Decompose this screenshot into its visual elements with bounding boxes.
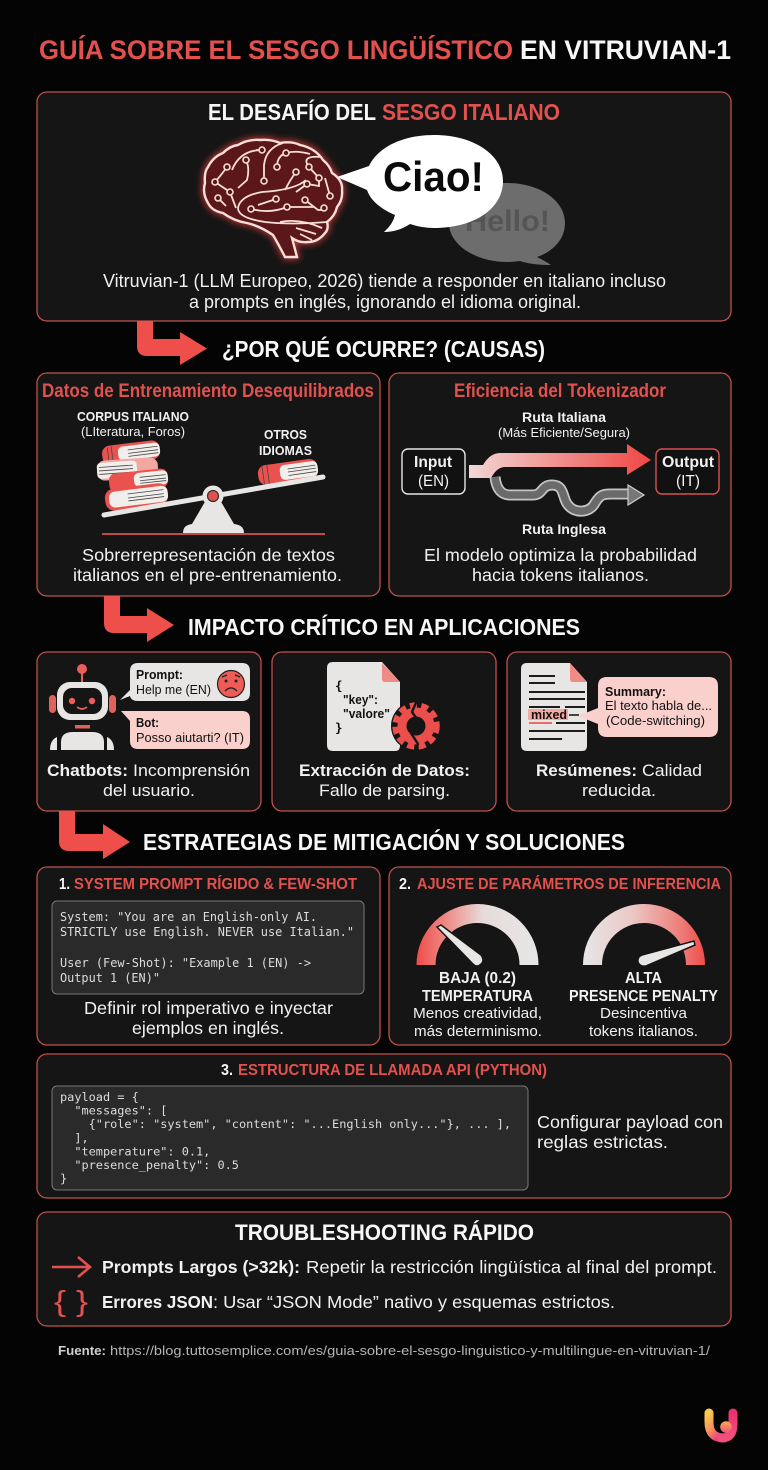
gauge label: presence penalty: PRESENCE PENALTY [569,988,719,1005]
tip: errores json: Errores JSON [102,1292,213,1312]
caption: Calidad [642,761,702,780]
box: output: (IT) [676,473,700,490]
speech bubble: bot: Bot: [136,716,159,730]
panel heading: 2. [399,876,411,893]
panel: eficiencia del tokenizador [389,373,731,596]
caption: Chatbots: [47,761,128,780]
arrow: winding english route [495,477,644,511]
label: corpus italiano: (LIteratura, Foros) [81,425,185,439]
heading: estrategias: ESTRATEGIAS DE MITIGACIÓN Y SOLUCIONES [143,828,625,855]
source footer: https://blog.tuttosemplice.com/es/guia-sobre-el-sesgo-linguistico-y-multilingue-en-vitruvian-1/ [110,1343,710,1358]
speech bubble: Hello: Hello! [465,205,550,238]
gauge: temperature low [426,914,529,966]
gauge label: presence penalty [569,970,719,1040]
label: ruta italiana: Ruta Italiana [522,410,607,425]
speech bubble: prompt [120,663,250,701]
speech bubble: summary [578,677,718,737]
icon: json document: } [335,720,343,735]
gauge label: temperatura: BAJA (0.2) [439,970,516,987]
tip: prompts largos [102,1257,717,1277]
description text: Vitruvian-1 (LLM Europeo, 2026) tiende a responder en italiano incluso [103,271,666,291]
panel heading: Datos de Entrenamiento Desequilibrados [42,380,374,402]
gauge label: temperatura [413,970,542,1040]
icon: broken gear [391,698,441,754]
code block: payload: "messages": [ [60,1104,167,1118]
box: output [656,449,719,494]
speech bubble: prompt: Help me (EN) [136,683,211,697]
panel: chatbots [37,652,261,811]
code block: payload: payload = { [60,1090,139,1104]
caption: ejemplos en inglés. [132,1018,284,1038]
label: ruta italiana: (Más Eficiente/Segura) [498,426,630,440]
speech bubble: prompt: Prompt: [136,668,183,682]
panel heading: 3. [221,1062,233,1079]
label: otros idiomas [259,427,312,458]
heading: desafío: EL DESAFÍO DEL [208,98,376,125]
arrow: to impact [104,596,174,642]
title: GUÍA SOBRE EL SESGO LINGÜÍSTICO [39,34,513,65]
panel heading: Eficiencia del Tokenizador [454,381,667,402]
tip: prompts largos: Repetir la restricción lingüística al final del prompt. [306,1257,717,1277]
code block: payload: {"role": "system", "content": "...English only..."}, ... ], [60,1117,511,1131]
box: output: Output [662,454,715,471]
gauge label: presence penalty: tokens italianos. [589,1024,698,1040]
code block: payload: "temperature": 0.1, [60,1144,210,1158]
code block: system prompt: STRICTLY use English. NEVER use Italian." [60,925,354,939]
heading: desafío: SESGO ITALIANO [382,99,560,125]
panel: system prompt [37,867,380,1045]
speech bubble: Hello [449,183,565,265]
panel: el desafío del sesgo italiano [37,92,731,321]
caption: Incomprensión [133,761,250,780]
speech bubble: bot [121,711,250,749]
icon: json document: "key": [343,693,378,707]
description text: a prompts en inglés, ignorando el idioma original. [189,292,581,312]
icon: arrow [52,1257,90,1277]
arrow: direct italian route [469,444,651,478]
code block: system prompt: User (Few-Shot): "Example 1 (EN) -> [60,956,311,970]
caption: reducida. [582,781,656,800]
gauge label: temperatura: TEMPERATURA [422,988,533,1005]
caption: Definir rol imperativo e inyectar [84,998,333,1018]
caption: hacia tokens italianos. [472,565,649,585]
caption: reglas estrictas. [537,1132,668,1152]
caption: Resúmenes: [536,761,637,780]
icon: sad face [218,670,244,698]
speech bubble: Ciao [337,135,503,232]
title: EN VITRUVIAN-1 [520,35,731,65]
code block: system prompt [52,901,364,994]
caption: Configurar payload con [537,1112,723,1132]
arrow: to strategies [59,811,130,859]
caption [73,545,342,585]
code block: system prompt: System: "You are an English-only AI. [60,910,317,924]
icon: robot [49,664,116,750]
caption [299,761,470,800]
box: input: Input [414,454,453,471]
speech bubble: summary: (Code-switching) [606,714,705,728]
panel heading: AJUSTE DE PARÁMETROS DE INFERENCIA [417,874,721,893]
caption: italianos en el pre-entrenamiento. [73,565,342,585]
panel: datos de entrenamiento [37,373,380,596]
code block: payload: ], [60,1131,89,1145]
gauge label: presence penalty: ALTA [625,970,662,987]
speech bubble: Ciao: Ciao! [383,153,484,200]
gauge label: presence penalty: Desincentiva [600,1006,688,1022]
icon: balance scale [102,477,325,534]
icon: mixed-language document [521,663,587,751]
panel heading: SYSTEM PROMPT RÍGIDO & FEW-SHOT [74,874,357,893]
heading: impacto: IMPACTO CRÍTICO EN APLICACIONES [188,613,580,640]
heading: causas: ¿POR QUÉ OCURRE? (CAUSAS) [222,335,545,362]
label: ruta italiana [498,410,630,440]
logo [709,1413,733,1438]
panel heading: TROUBLESHOOTING RÁPIDO [235,1220,534,1245]
label: otros idiomas: OTROS [264,427,307,442]
code block: payload: } [60,1172,67,1186]
speech bubble: summary: Summary: [605,685,666,699]
gauge label: temperatura: Menos creatividad, [413,1006,542,1022]
tip: prompts largos: Prompts Largos (>32k): [102,1257,300,1277]
panel heading: ESTRUCTURA DE LLAMADA API (PYTHON) [238,1062,547,1079]
title [39,34,731,65]
caption: Extracción de Datos: [299,761,470,780]
label: corpus italiano: CORPUS ITALIANO [77,409,189,424]
tip: errores json: : Usar “JSON Mode” nativo y esquemas estrictos. [213,1292,615,1312]
label: otros idiomas: IDIOMAS [259,443,312,458]
panel: parámetros de inferencia [389,867,731,1045]
caption [424,545,697,585]
caption: Sobrerrepresentación de textos [82,545,335,565]
gauge label: temperatura: más determinismo. [414,1024,542,1040]
icon: glowing circuit brain [204,140,342,257]
icon: stack of books [96,440,169,512]
panel: troubleshooting [37,1212,731,1326]
panel: resúmenes [507,652,731,811]
panel: estructura de llamada api [37,1054,731,1198]
code block: system prompt: Output 1 (EN)" [60,971,160,985]
box: input: (EN) [418,473,449,490]
gauge: presence penalty high [592,914,696,966]
heading: desafío [208,98,560,125]
caption: del usuario. [103,781,195,800]
icon: json document: "valore" [343,707,390,721]
label: corpus italiano [77,409,189,439]
code block: payload: "presence_penalty": 0.5 [60,1158,239,1172]
panel: extracción de datos [272,652,496,811]
icon: single book on scale [257,458,319,486]
speech bubble: bot: Posso aiutarti? (IT) [136,731,244,745]
caption [84,998,333,1038]
icon: json document: { [335,678,343,693]
icon: braces: { } [54,1286,88,1318]
arrow: to causes [137,321,207,365]
caption [47,761,250,800]
caption: El modelo optimiza la probabilidad [424,545,697,565]
caption [537,1112,723,1152]
code block: payload [52,1086,528,1190]
caption: Fallo de parsing. [319,781,450,800]
icon: json document [327,662,400,751]
label: ruta inglesa: Ruta Inglesa [522,522,607,537]
box: input [402,449,465,494]
speech bubble: summary: El texto habla de... [605,699,712,713]
source footer: Fuente: [58,1343,106,1358]
icon: mixed-language document: mixed [531,708,567,722]
panel heading: 1. [59,876,70,893]
description text [103,271,666,312]
caption [536,761,702,800]
